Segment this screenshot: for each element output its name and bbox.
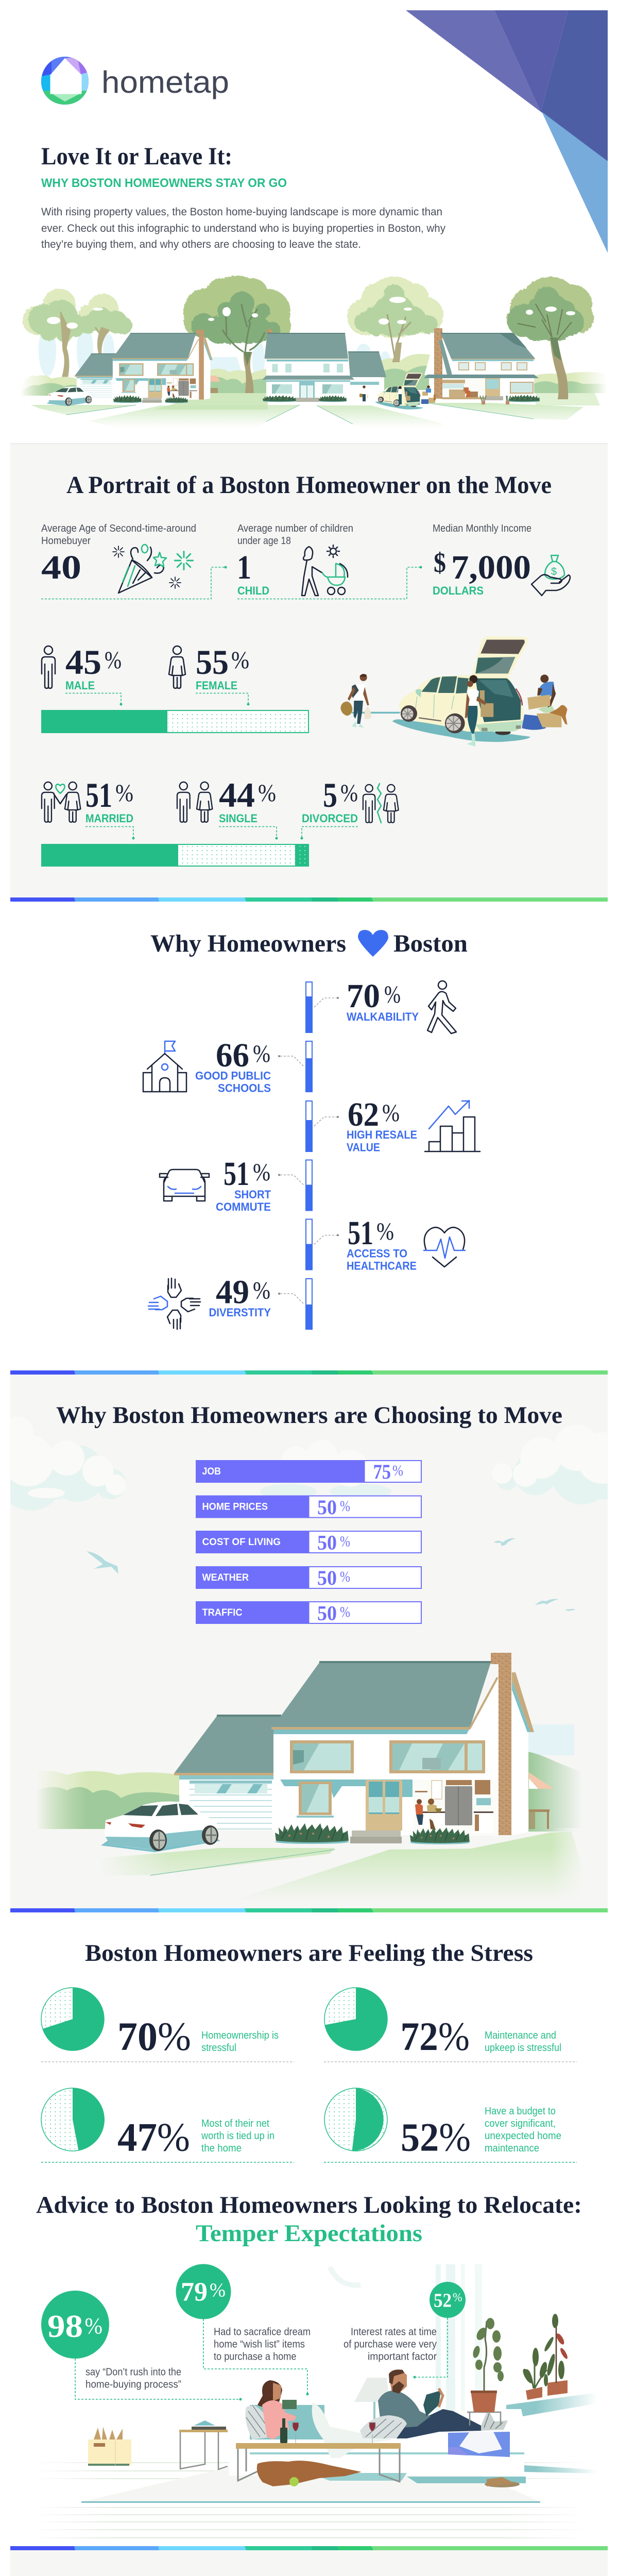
bar: short commute 51%: SHORT	[234, 1188, 271, 1201]
stat: married	[42, 775, 135, 840]
stat: divorced: DIVORCED	[302, 812, 358, 825]
intro paragraph: With rising property values, the Boston home-buying landscape is more dynamic than	[41, 206, 442, 218]
pie chart: 52%	[324, 2088, 561, 2160]
heading: Why Boston Homeowners are Choosing to Move	[56, 1402, 562, 1429]
bar: home prices: 50	[317, 1496, 337, 1519]
pie chart: 72%: upkeep is stressful	[485, 2042, 561, 2054]
stat: median income: 7,000	[451, 549, 531, 586]
bar: cost of living: %	[340, 1533, 350, 1550]
icon: party popper	[113, 545, 193, 593]
intro paragraph: ever. Check out this infographic to understand who is buying properties in Boston, why	[41, 223, 445, 234]
bar: access to healthcare 51%: HEALTHCARE	[347, 1259, 417, 1273]
callout: 79%: to purchase a home	[214, 2351, 297, 2363]
icon: money bag in hand	[531, 555, 570, 596]
bar: traffic: 50	[317, 1601, 337, 1625]
bar: weather	[196, 1566, 421, 1589]
pie chart: 72%: 72%	[401, 2014, 470, 2059]
panel: advice to owners	[10, 2546, 608, 2576]
heading: Boston	[393, 930, 468, 957]
color band	[10, 1370, 608, 1375]
bar: good public schools 66%: SCHOOLS	[218, 1082, 271, 1094]
icon: money bag in hand: $	[551, 566, 557, 578]
stat: divorced	[301, 775, 399, 840]
logo: hometap	[41, 57, 229, 105]
icon: four hands	[148, 1278, 200, 1329]
callout: 98%: %	[84, 2313, 102, 2338]
pie chart: 52%: Have a budget to	[485, 2106, 556, 2117]
heading	[36, 2192, 582, 2247]
bar: weather: 50	[317, 1566, 337, 1589]
callout: 52%: important factor	[368, 2351, 437, 2363]
pie chart: 47%: the home	[201, 2143, 242, 2154]
pie chart: 70%	[41, 1988, 279, 2059]
panel: portrait of a Boston homeowner	[10, 443, 608, 902]
icon: walking person	[427, 981, 456, 1033]
stat: single: 44	[219, 775, 255, 815]
stat: average children: CHILD	[237, 584, 269, 597]
pie chart: 47%: worth is tied up in	[201, 2130, 274, 2142]
icon: parent with stroller	[302, 545, 348, 596]
stat: average children: Average number of children	[237, 523, 353, 534]
icon: heart with pulse	[424, 1227, 465, 1267]
pie chart: 52%: unexpected home	[485, 2130, 561, 2142]
pie chart: 47%: Most of their net	[201, 2118, 269, 2129]
stat: female	[169, 642, 249, 706]
stat: female: %	[231, 647, 249, 674]
pie chart: 47%	[41, 2088, 274, 2160]
bar: traffic	[196, 1601, 421, 1625]
color band	[10, 2546, 608, 2550]
callout: 98%	[41, 2291, 242, 2401]
bar: walkability 70%: 70	[347, 977, 380, 1015]
bar: job: JOB	[202, 1466, 221, 1477]
stat: average children: under age 18	[237, 535, 291, 547]
bar: high resale value 62%: %	[382, 1099, 400, 1127]
heading: Temper Expectations	[196, 2220, 422, 2247]
callout: 79%: 79	[181, 2277, 208, 2307]
bar: diversity 49%: 49	[216, 1274, 249, 1311]
callout: 98%: say “Don’t rush into the	[85, 2367, 181, 2378]
stat: male	[42, 642, 123, 706]
title: Love It or Leave It:	[41, 143, 232, 170]
bar: traffic: TRAFFIC	[202, 1607, 243, 1618]
pie chart: 47%: 47%	[117, 2114, 190, 2160]
callout: 79%: %	[210, 2279, 226, 2301]
pie chart: 70%: 70%	[117, 2014, 191, 2059]
bar: high resale value 62%: HIGH RESALE	[347, 1128, 417, 1141]
stat: female: FEMALE	[196, 679, 237, 692]
section: advice, temper expectations	[31, 2192, 597, 2538]
stat: median income	[433, 523, 531, 597]
illustration: neighborhood houses	[21, 276, 607, 428]
icon: school	[143, 1041, 186, 1092]
intro paragraph	[41, 206, 445, 250]
stat: average age: Average Age of Second-time-around	[41, 523, 196, 534]
stat: single: SINGLE	[219, 812, 258, 825]
bar: access to healthcare 51%: 51	[348, 1214, 373, 1252]
illustration: couple on sofa	[31, 2264, 597, 2538]
intro paragraph: they’re buying them, and why others are choosing to leave the state.	[41, 239, 361, 250]
stat: median income: $	[434, 547, 446, 578]
stat: married: %	[115, 779, 133, 807]
bar: weather: %	[340, 1568, 350, 1585]
pie chart: 72%: Maintenance and	[485, 2030, 556, 2041]
callout: 52%: of purchase were very	[344, 2339, 437, 2350]
stat: average children: 1	[237, 549, 251, 586]
heading: Advice to Boston Homeowners Looking to Relocate:	[36, 2192, 582, 2218]
bar: good public schools 66%: 66	[216, 1037, 249, 1074]
bar: job: %	[392, 1462, 403, 1479]
color band	[10, 897, 608, 902]
bar: high resale value 62%	[305, 1096, 417, 1154]
bar: high resale value 62%: 62	[348, 1096, 379, 1133]
bar: access to healthcare 51%	[305, 1214, 417, 1273]
stat: married: 51	[85, 775, 112, 815]
callout: 52%: %	[453, 2291, 462, 2304]
stat: divorced: 5	[323, 775, 337, 815]
bar: good public schools 66%	[195, 1037, 313, 1094]
bar chart: marital status	[41, 844, 309, 867]
bar: good public schools 66%: GOOD PUBLIC	[195, 1070, 271, 1082]
bar: walkability 70%: %	[384, 981, 401, 1008]
bar: job: 75	[373, 1460, 391, 1483]
bar: cost of living: COST OF LIVING	[202, 1537, 281, 1548]
bar: walkability 70%: WALKABILITY	[347, 1010, 419, 1023]
bar: cost of living	[196, 1531, 421, 1554]
bar: walkability 70%	[305, 977, 419, 1033]
background corner triangles	[406, 10, 608, 253]
bar: cost of living: 50	[317, 1531, 337, 1554]
bar: diversity 49%: %	[253, 1277, 270, 1304]
logo: hometap: hometap	[101, 65, 229, 99]
callout: 79%: home “wish list” items	[214, 2339, 305, 2350]
clouds	[10, 1445, 608, 1511]
bar: short commute 51%: %	[253, 1159, 270, 1186]
illustration: family loading car	[340, 636, 568, 747]
stat: single: %	[258, 779, 276, 807]
bar: short commute 51%: COMMUTE	[216, 1200, 271, 1213]
bar: traffic: %	[340, 1603, 350, 1621]
bar: job	[196, 1460, 421, 1483]
illustration: house with car	[31, 1653, 597, 1903]
stat: average age: 40	[41, 549, 81, 586]
birds	[87, 1538, 575, 1611]
stat: male: MALE	[65, 679, 95, 692]
bar: home prices	[196, 1495, 421, 1519]
bar: home prices: HOME PRICES	[202, 1501, 268, 1513]
bar chart: gender	[41, 710, 308, 733]
heading	[150, 930, 468, 957]
bar: home prices: %	[340, 1498, 350, 1515]
callout: 98%: 98	[47, 2309, 83, 2344]
subtitle: WHY BOSTON HOMEOWNERS STAY OR GO	[41, 176, 287, 190]
stat: median income: DOLLARS	[433, 584, 484, 597]
heading: Boston Homeowners are Feeling the Stress	[85, 1940, 533, 1967]
bar: access to healthcare 51%: %	[376, 1218, 394, 1245]
bar: diversity 49%: DIVERSTITY	[209, 1306, 271, 1319]
bar: access to healthcare 51%: ACCESS TO	[347, 1247, 407, 1260]
color band	[10, 1908, 608, 1912]
stat: median income: Median Monthly Income	[433, 523, 531, 534]
pie chart: 70%: Homeownership is	[201, 2030, 279, 2041]
stat: average age: Homebuyer	[41, 535, 91, 547]
stat: average age	[41, 523, 227, 599]
stat: divorced: %	[340, 779, 358, 807]
stat: female: 55	[196, 642, 229, 682]
icon: rising chart	[425, 1100, 480, 1151]
heading: A Portrait of a Boston Homeowner on the Move	[66, 471, 552, 499]
pie chart: 52%: 52%	[401, 2114, 471, 2160]
panel: why homeowners are choosing to move	[0, 1370, 618, 1912]
stat: single	[177, 775, 278, 840]
callout: 98%: home-buying process”	[85, 2379, 181, 2391]
bar: weather: WEATHER	[202, 1572, 249, 1583]
bar: short commute 51%	[216, 1155, 313, 1213]
bar: good public schools 66%: %	[253, 1040, 270, 1067]
stat: married: MARRIED	[85, 812, 133, 825]
callout: 79%: Had to sacrafice dream	[214, 2327, 311, 2338]
bar: high resale value 62%: VALUE	[347, 1141, 380, 1154]
callout: 52%: 52	[434, 2290, 452, 2311]
section: homeowners feeling the stress	[41, 1940, 577, 2162]
pie chart: 70%: stressful	[201, 2042, 236, 2054]
callout: 79%	[176, 2264, 311, 2396]
bar: short commute 51%: 51	[224, 1155, 249, 1193]
pie chart: 52%: cover significant,	[485, 2118, 556, 2129]
stat: male: 45	[65, 642, 101, 682]
stat: average children	[237, 523, 422, 599]
callout: 52%: Interest rates at time	[351, 2327, 437, 2338]
callout: 52%	[344, 2282, 466, 2378]
icon: car	[160, 1170, 209, 1201]
bar: diversity 49%	[209, 1274, 313, 1330]
heading: Why Homeowners	[150, 930, 346, 957]
pie chart: 72%	[324, 1988, 561, 2059]
stat: male: %	[105, 647, 122, 674]
section: why homeowners love Boston	[143, 930, 480, 1330]
pie chart: 52%: maintenance	[485, 2143, 539, 2154]
